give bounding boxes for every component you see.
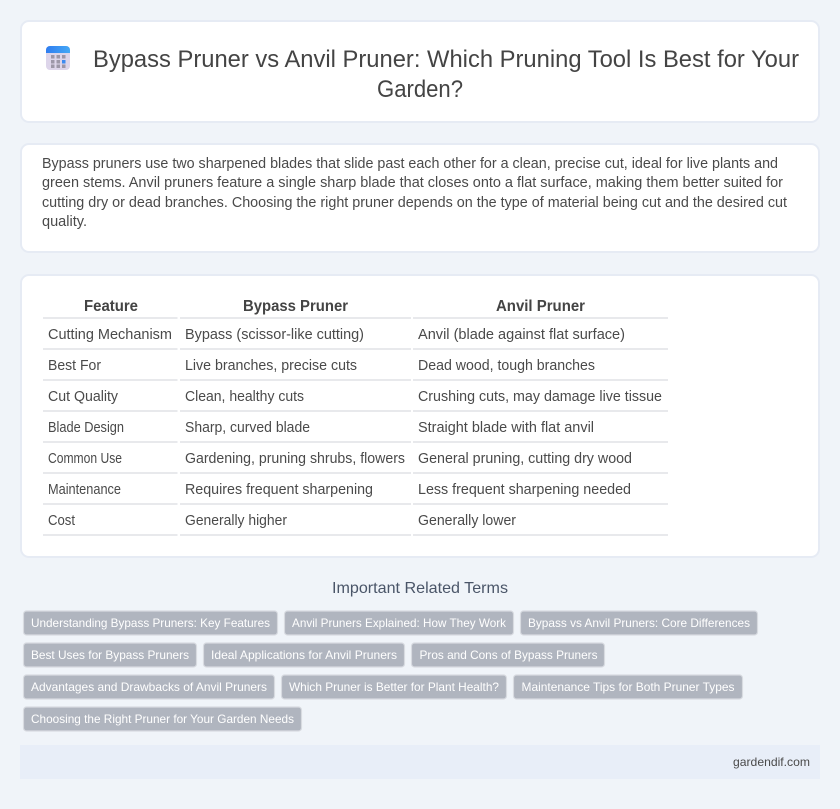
related term tags: Choosing the Right Pruner for Your Garden Needs bbox=[31, 712, 294, 726]
text block: intro paragraph: quality. bbox=[42, 214, 87, 230]
related term tags: Which Pruner is Better for Plant Health? bbox=[289, 680, 499, 694]
row: blade design: Sharp, curved blade bbox=[185, 420, 310, 436]
row: cutting mechanism: Anvil (blade against flat surface) bbox=[418, 327, 625, 343]
row: blade design: Blade Design bbox=[48, 420, 124, 436]
title: Bypass Pruner vs Anvil Pruner: Which Pruning Tool Is Best for Your bbox=[93, 46, 799, 73]
row: best for bbox=[48, 358, 595, 374]
row: common use: General pruning, cutting dry wood bbox=[418, 451, 632, 467]
row: cost bbox=[48, 513, 516, 529]
row: common use: Gardening, pruning shrubs, flowers bbox=[185, 451, 405, 467]
row: cut quality: Clean, healthy cuts bbox=[185, 389, 304, 405]
row: common use: Common Use bbox=[48, 451, 122, 467]
row: cutting mechanism: Bypass (scissor-like cutting) bbox=[185, 327, 364, 343]
related term tags: Best Uses for Bypass Pruners bbox=[31, 648, 189, 662]
row: maintenance bbox=[48, 482, 631, 498]
row: cost: Generally higher bbox=[185, 513, 287, 529]
related term tags: Pros and Cons of Bypass Pruners bbox=[420, 648, 598, 662]
row: blade design: Straight blade with flat anvil bbox=[418, 420, 594, 436]
related term tags: Understanding Bypass Pruners: Key Features bbox=[31, 616, 270, 630]
related term tags: Bypass vs Anvil Pruners: Core Differences bbox=[528, 616, 750, 630]
text block: intro paragraph: cutting dry or dead branches. Choosing the right pruner depends on the type of material being cut and the desired cut bbox=[42, 195, 787, 211]
row: blade design bbox=[48, 420, 594, 436]
row: maintenance: Maintenance bbox=[48, 482, 121, 498]
related term tags bbox=[24, 611, 758, 731]
related term tags: Maintenance Tips for Both Pruner Types bbox=[522, 680, 734, 694]
related term tags: Anvil Pruners Explained: How They Work bbox=[292, 616, 507, 630]
panel: intro bbox=[21, 144, 819, 252]
row: cutting mechanism bbox=[48, 327, 625, 343]
row: maintenance: Requires frequent sharpening bbox=[185, 482, 373, 498]
title: Garden? bbox=[377, 76, 463, 103]
row: cut quality: Crushing cuts, may damage live tissue bbox=[418, 389, 662, 405]
footer: gardendif.com bbox=[733, 755, 810, 769]
row: best for: Live branches, precise cuts bbox=[185, 358, 357, 374]
row: common use bbox=[48, 451, 632, 467]
row: best for: Best For bbox=[48, 358, 101, 374]
related term tags: Ideal Applications for Anvil Pruners bbox=[211, 648, 397, 662]
table header: Bypass Pruner bbox=[243, 298, 348, 315]
heading: related terms: Important Related Terms bbox=[332, 580, 508, 597]
footer bbox=[20, 745, 820, 779]
row: cutting mechanism: Cutting Mechanism bbox=[48, 327, 172, 343]
table header: Anvil Pruner bbox=[496, 298, 585, 315]
title bbox=[93, 46, 799, 103]
related term tags: Advantages and Drawbacks of Anvil Pruners bbox=[31, 680, 267, 694]
row: maintenance: Less frequent sharpening needed bbox=[418, 482, 631, 498]
row: best for: Dead wood, tough branches bbox=[418, 358, 595, 374]
text block: intro paragraph bbox=[42, 156, 787, 230]
panel: comparison table bbox=[21, 275, 819, 557]
table header bbox=[84, 298, 585, 315]
row: cost: Cost bbox=[48, 513, 75, 529]
row: cut quality: Cut Quality bbox=[48, 389, 119, 405]
row: cost: Generally lower bbox=[418, 513, 516, 529]
text block: intro paragraph: green stems. Anvil pruners feature a single sharp blade that closes onto a flat surface, making them better suited for bbox=[42, 175, 783, 191]
text block: intro paragraph: Bypass pruners use two sharpened blades that slide past each other for a clean, precise cut, ideal for live plants and bbox=[42, 156, 778, 172]
icon: calendar bbox=[46, 46, 70, 70]
table header: Feature bbox=[84, 298, 138, 315]
row: cut quality bbox=[48, 389, 662, 405]
panel: header bbox=[21, 21, 819, 122]
